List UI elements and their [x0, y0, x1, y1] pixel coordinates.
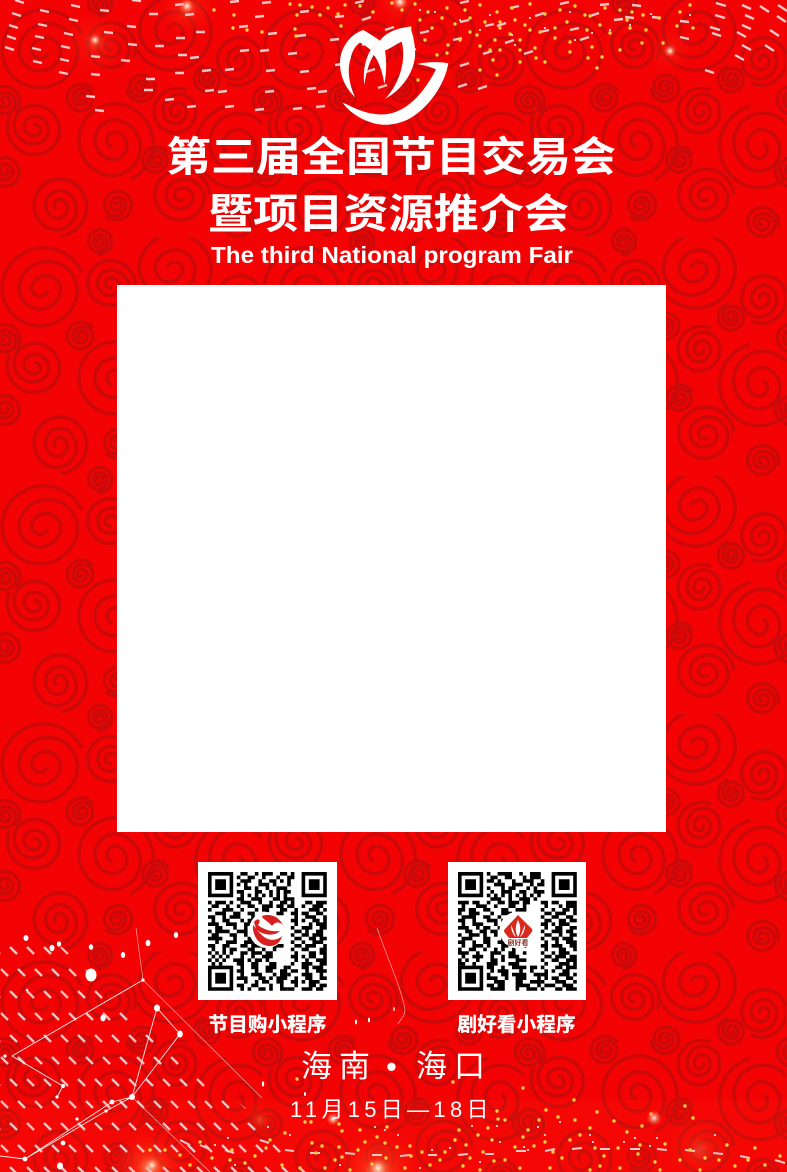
decoration: bottom-left dashes [0, 930, 310, 1172]
label: 剧好看小程序: 剧好看小程序 [458, 1013, 576, 1036]
title: two-line Chinese heading [166, 134, 616, 237]
icon: red fish logo in QR [249, 912, 285, 948]
decoration: top gold sparkles [214, 3, 693, 80]
title: two-line Chinese heading: 第三届全国节目交易会 [166, 134, 616, 180]
QR code: 节目购小程序 [198, 862, 337, 1000]
decoration: constellation network [0, 928, 405, 1172]
icon: red diamond logo in QR: 剧好看 [508, 938, 528, 947]
logo: white lotus [340, 27, 448, 125]
QR code: 剧好看小程序 [448, 862, 586, 1000]
title: two-line Chinese heading: 暨项目资源推介会 [208, 191, 569, 237]
date text: 11月15日—18日 [290, 1097, 493, 1122]
panel: blank white photo area [117, 285, 666, 832]
subtitle: English name: The third National program Fair [211, 242, 573, 268]
label: 节目购小程序: 节目购小程序 [208, 1013, 327, 1036]
decoration: top white dashes [5, 0, 787, 111]
location text: 海南•海口 [301, 1049, 485, 1084]
